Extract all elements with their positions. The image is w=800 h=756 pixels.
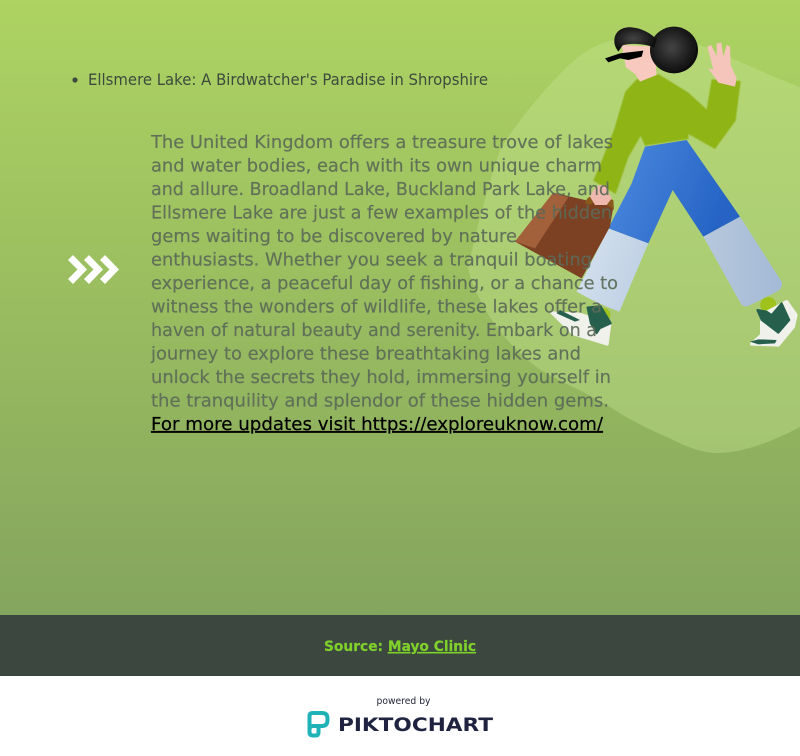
- decorative blob: [468, 37, 800, 453]
- source credit: Source: Mayo Clinic: [324, 639, 476, 655]
- body paragraph: unlock the secrets they hold, immersing yourself in: [151, 367, 611, 388]
- sweater: [593, 74, 741, 194]
- white footer: [0, 676, 800, 756]
- gripping hand: [590, 185, 612, 205]
- front leg cuff: [577, 228, 648, 312]
- Piktochart wordmark: PIKTOCHART: [338, 714, 493, 736]
- bullet item: Ellsmere Lake: A Birdwatcher's Paradise in Shropshire: [88, 70, 488, 89]
- icon: triple chevron arrow: [68, 255, 119, 284]
- back leg cuff: [703, 217, 782, 306]
- body paragraph: haven of natural beauty and serenity. Embark on a: [151, 320, 597, 341]
- source bar: [0, 615, 800, 676]
- body paragraph: and water bodies, each with its own unique charm: [151, 156, 602, 176]
- powered by label: powered by: [376, 696, 431, 707]
- body paragraph: [150, 132, 618, 412]
- front shoe: [552, 306, 611, 344]
- back shoe: [750, 297, 796, 345]
- body paragraph: witness the wonders of wildlife, these lakes offer a: [151, 296, 602, 318]
- body paragraph: the tranquility and splendor of these hidden gems.: [151, 390, 609, 412]
- body paragraph: experience, a peaceful day of fishing, or a chance to: [151, 273, 618, 294]
- icon: Piktochart logo mark: [310, 713, 328, 736]
- trousers: [608, 140, 740, 243]
- website link: For more updates visit https://exploreuknow.com/: [151, 414, 604, 435]
- face and neck: [622, 45, 657, 82]
- briefcase: [515, 193, 614, 278]
- hair: [614, 27, 698, 73]
- body paragraph: gems waiting to be discovered by nature: [151, 226, 517, 247]
- body paragraph: enthusiasts. Whether you seek a tranquil boating: [151, 250, 592, 270]
- body paragraph: and allure. Broadland Lake, Buckland Park Lake, and: [151, 179, 610, 200]
- body paragraph: Ellsmere Lake are just a few examples of the hidden: [151, 202, 612, 224]
- illustration: walking woman with briefcase: [515, 27, 796, 345]
- sunglasses: [605, 51, 643, 62]
- body paragraph: The United Kingdom offers a treasure trove of lakes: [150, 132, 613, 153]
- body paragraph: journey to explore these breathtaking lakes and: [150, 344, 581, 364]
- raised hand: [707, 43, 737, 87]
